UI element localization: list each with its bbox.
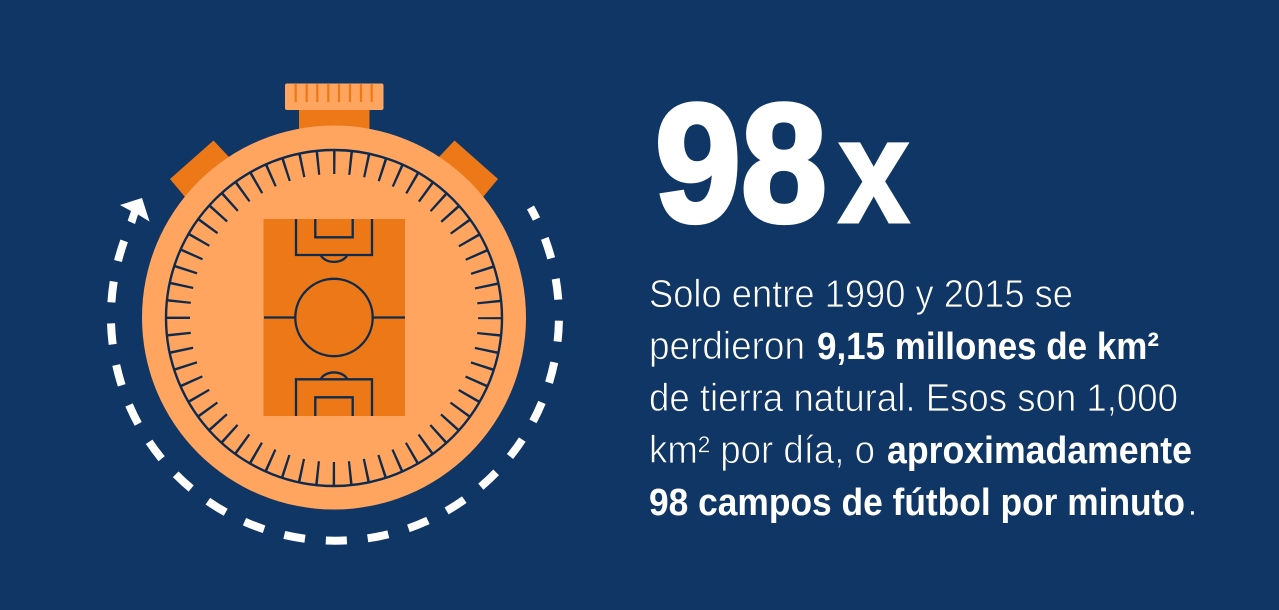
body text: aproximadamente (887, 430, 1192, 472)
right side button (439, 140, 498, 197)
body text: km² por día, o (649, 429, 875, 472)
body text: Solo entre 1990 y 2015 se (649, 273, 1073, 316)
left side button (170, 140, 229, 197)
icon: stopwatch (142, 84, 526, 510)
stopwatch neck (299, 108, 370, 138)
dial ring (166, 150, 502, 486)
football pitch (264, 219, 405, 416)
body text: 9,15 millones de km² (817, 326, 1159, 368)
body text (649, 273, 1198, 524)
stopwatch crown (285, 84, 384, 110)
heading: 98x: x (838, 89, 909, 254)
dashed arc (111, 208, 559, 541)
heading: 98x: 98 (655, 70, 827, 257)
body text: . (1187, 481, 1198, 524)
arrowhead (120, 198, 150, 224)
body text: 98 campos de fútbol por minuto (649, 482, 1185, 524)
body text: perdieron (649, 325, 805, 368)
heading: 98x (655, 70, 909, 257)
body text: de tierra natural. Esos son 1,000 (649, 377, 1178, 420)
watch body (142, 126, 526, 510)
dial tick marks (178, 162, 490, 474)
dashed circular arrow (111, 198, 559, 541)
